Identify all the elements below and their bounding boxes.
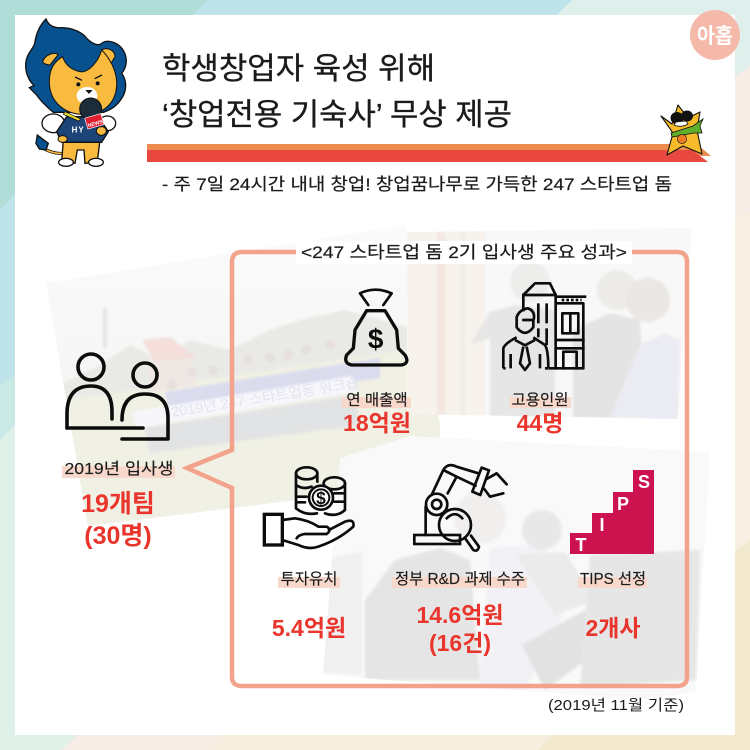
metric: annual sales: 18억원 [343, 410, 411, 436]
icon: money bag: $ [368, 323, 384, 354]
photo: students at wall [407, 231, 682, 419]
metric: investment: 투자유치 [280, 570, 338, 588]
mascot: lion reporter: HY [72, 125, 85, 134]
icon: money bag [346, 290, 407, 365]
metric: TIPS selection: 2개사 [585, 615, 641, 641]
footnote: reference date: (2019년 11월 기준) [548, 697, 684, 714]
lion face [49, 50, 117, 114]
metric: government R&D: 14.6억원 [416, 602, 504, 628]
badge: series label [690, 10, 740, 60]
entrants value: (30명) [84, 522, 152, 550]
metric: government R&D: (16건) [429, 630, 491, 656]
metric: employees [510, 391, 571, 436]
lion arms [42, 114, 65, 133]
icon: TIPS staircase: P [617, 494, 629, 514]
metric: government R&D [392, 570, 527, 656]
mascot: lion reporter [26, 19, 126, 166]
mascot: star with sunglasses [661, 105, 703, 155]
lion microphone [80, 98, 102, 120]
lion hands [58, 136, 67, 142]
icon: TIPS staircase: I [599, 515, 605, 535]
entrants value: 19개팀 [81, 490, 155, 518]
icon: hand with coins [264, 467, 354, 548]
icon: TIPS staircase: T [576, 535, 586, 555]
entrants value [81, 490, 155, 550]
title: 학생창업자 육성 위해 [162, 52, 435, 86]
title: ‘창업전용 기숙사’ 무상 제공 [162, 98, 512, 132]
metric: investment [272, 570, 346, 641]
lion feet [59, 158, 73, 166]
title ribbon [147, 144, 711, 162]
metric: TIPS selection: TIPS 선정 [580, 570, 646, 588]
metric: TIPS selection [578, 570, 647, 641]
metric: employees: 고용인원 [511, 391, 569, 409]
badge: series label: 아홉 [697, 25, 733, 48]
entrants label: 2019년 입사생 [64, 460, 174, 478]
frame heading: <247 스타트업 돔 2기 입사생 주요 성과> [301, 243, 627, 262]
metric: annual sales [342, 391, 411, 436]
photo: workshop group [56, 306, 440, 526]
icon: two people [67, 354, 168, 439]
metric: employees: 44명 [517, 410, 563, 436]
lion shirt [57, 117, 108, 142]
icon: TIPS staircase: S [638, 472, 650, 492]
metric: annual sales: 연 매출액 [346, 391, 408, 409]
lion mane [26, 19, 126, 112]
metric: investment: 5.4억원 [272, 615, 346, 641]
speech-bubble frame [187, 252, 687, 686]
metric: government R&D: 정부 R&D 과제 수주 [395, 570, 525, 588]
lion ears [43, 53, 58, 65]
photo: workshop group: 2019년 247 스타트업동 워크숍 [170, 374, 360, 420]
subtitle: - 주 7일 24시간 내내 창업! 창업꿈나무로 가득한 247 스타트업 돔 [162, 175, 672, 194]
icon: robot arm with magnifier [414, 465, 507, 551]
lion tail [43, 148, 65, 153]
icon: TIPS staircase [570, 470, 654, 555]
lion legs [62, 140, 100, 163]
photo: students at computers [324, 436, 702, 691]
mascot: lion reporter: NEWS [87, 119, 104, 129]
title [162, 52, 512, 132]
icon: hand with coins: $ [316, 488, 326, 508]
icon: person and buildings [503, 283, 585, 370]
